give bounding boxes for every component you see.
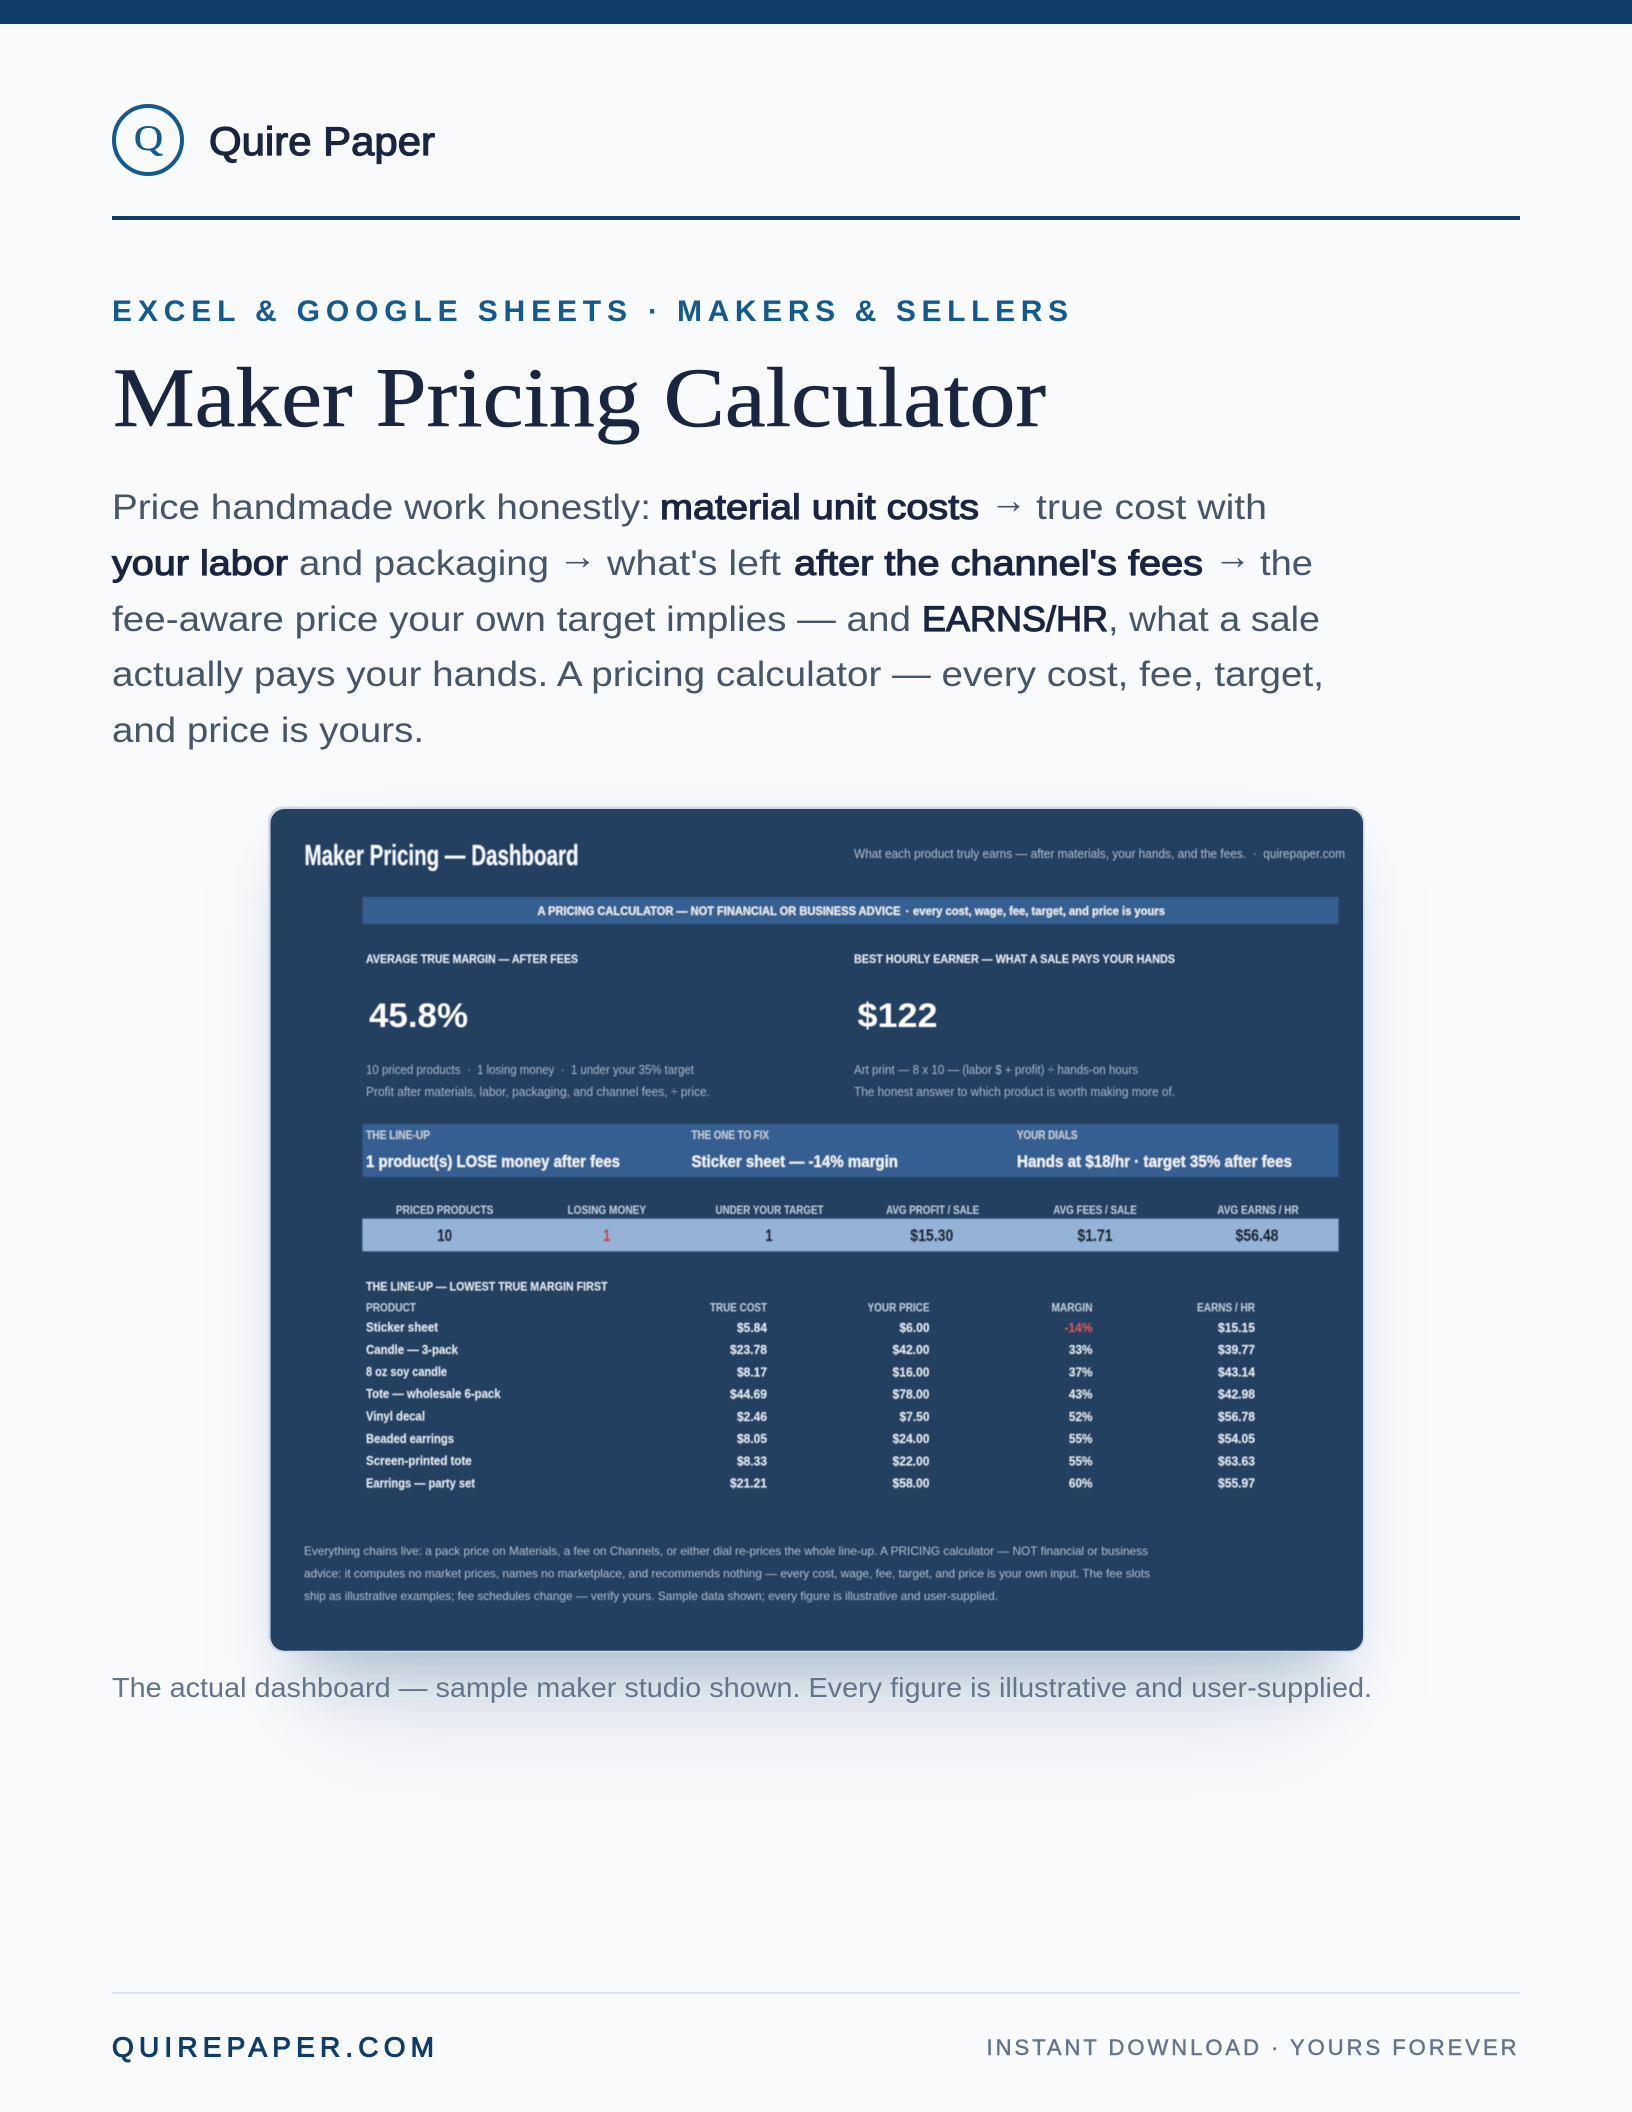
footer rule xyxy=(112,1992,1520,1994)
row: Beaded earrings: $24.00 xyxy=(892,1432,930,1446)
callout band: YOUR DIALS xyxy=(1017,1130,1078,1142)
row: Tote wholesale: $44.69 xyxy=(730,1388,767,1402)
callout band: THE LINE-UP xyxy=(366,1130,430,1142)
row: Candle 3-pack: $23.78 xyxy=(730,1343,767,1357)
row: Vinyl decal: 52% xyxy=(1069,1410,1092,1424)
KPI strip: PRICED PRODUCTS xyxy=(396,1205,494,1217)
intro paragraph: Price handmade work honestly: xyxy=(112,487,651,527)
row: Vinyl decal: Vinyl decal xyxy=(366,1410,425,1424)
intro paragraph: → xyxy=(558,536,597,578)
line-up table xyxy=(366,1280,1256,1491)
row: Sticker sheet: $5.84 xyxy=(737,1321,767,1335)
row: Candle 3-pack: $42.00 xyxy=(892,1343,930,1357)
row: Screen-printed tote: $22.00 xyxy=(892,1454,930,1468)
row: 8 oz soy candle: $16.00 xyxy=(892,1366,930,1380)
dashboard shadow xyxy=(300,860,1332,1700)
intro paragraph: the xyxy=(1260,543,1313,583)
table header row: EARNS / HR xyxy=(1197,1303,1256,1315)
intro paragraph: actually pays your hands. A pricing calculator — every cost, fee, target, xyxy=(112,654,1324,694)
KPI strip: AVG PROFIT / SALE xyxy=(886,1205,979,1217)
intro paragraph: what's left xyxy=(606,543,781,583)
stat: best hourly earner: BEST HOURLY EARNER — WHAT A SALE PAYS YOUR HANDS xyxy=(854,952,1175,966)
callout band: Sticker sheet — -14% margin xyxy=(692,1153,898,1171)
row: Screen-printed tote: 55% xyxy=(1069,1454,1092,1468)
footer tagline: INSTANT DOWNLOAD · YOURS FOREVER xyxy=(986,2035,1516,2060)
row: Tote wholesale xyxy=(366,1387,1255,1402)
row: Beaded earrings: 55% xyxy=(1069,1432,1092,1446)
row: 8 oz soy candle: 8 oz soy candle xyxy=(366,1365,447,1379)
dashboard title: Maker Pricing — Dashboard xyxy=(304,840,578,872)
table header row: PRODUCT xyxy=(366,1303,416,1315)
row: Candle 3-pack xyxy=(366,1343,1255,1357)
row: Vinyl decal: $2.46 xyxy=(737,1410,767,1424)
intro paragraph: → xyxy=(990,480,1027,522)
eyebrow xyxy=(112,295,1068,328)
row: Sticker sheet: $6.00 xyxy=(900,1321,930,1335)
KPI strip xyxy=(362,1205,1338,1251)
intro paragraph: , what a sale xyxy=(1108,599,1320,639)
row: Candle 3-pack: Candle — 3-pack xyxy=(366,1343,458,1357)
dashboard card xyxy=(270,809,1363,1651)
row: Candle 3-pack: 33% xyxy=(1069,1343,1092,1357)
intro paragraph: true cost with xyxy=(1036,487,1267,527)
panel: dashboard screenshot xyxy=(268,806,1364,1652)
intro paragraph: and packaging xyxy=(299,543,549,583)
row: 8 oz soy candle: $43.14 xyxy=(1218,1366,1255,1380)
dashboard card border xyxy=(268,806,1364,1652)
KPI strip: LOSING MONEY xyxy=(568,1205,646,1217)
stat: best hourly earner: $122 xyxy=(858,997,938,1035)
row: Screen-printed tote: Screen-printed tote xyxy=(366,1454,472,1468)
disclaimer banner: every cost, wage, fee, target, and price is yours xyxy=(913,904,1165,918)
row: Screen-printed tote: $8.33 xyxy=(737,1454,767,1468)
stat: average true margin: 10 priced products · 1 losing money · 1 under your 35% target xyxy=(366,1063,694,1077)
row: Vinyl decal: $56.78 xyxy=(1218,1410,1255,1424)
row: 8 oz soy candle: $8.17 xyxy=(737,1366,767,1380)
KPI strip: 10 xyxy=(437,1227,452,1245)
table heading: THE LINE-UP — LOWEST TRUE MARGIN FIRST xyxy=(366,1280,608,1294)
KPI strip: AVG FEES / SALE xyxy=(1053,1205,1137,1217)
dashboard footnote: ship as illustrative examples; fee schedules change — verify yours. Sample data shown; every figure is illustrative and user-supplied. xyxy=(304,1589,998,1603)
table header row: TRUE COST xyxy=(710,1303,767,1315)
row: Screen-printed tote: $63.63 xyxy=(1218,1454,1255,1468)
callout band: Hands at $18/hr · target 35% after fees xyxy=(1017,1153,1292,1171)
row: Sticker sheet: Sticker sheet xyxy=(366,1320,439,1334)
top bar xyxy=(0,0,1632,24)
dashboard contents xyxy=(304,840,1345,1603)
dashboard footnote: advice: it computes no market prices, names no marketplace, and recommends nothing — every cost, wage, fee, target, and price is your own input. The fee slots xyxy=(304,1566,1150,1580)
stat: average true margin xyxy=(366,952,710,1099)
row: 8 oz soy candle: 37% xyxy=(1069,1366,1092,1380)
stat: best hourly earner: The honest answer to which product is worth making more of. xyxy=(854,1085,1175,1099)
header rule xyxy=(112,216,1520,220)
table header row: YOUR PRICE xyxy=(868,1303,930,1315)
table header row: MARGIN xyxy=(1052,1303,1092,1315)
callout band: 1 product(s) LOSE money after fees xyxy=(366,1153,620,1171)
row: Earrings party set: $21.21 xyxy=(730,1477,767,1491)
intro paragraph: → xyxy=(1214,536,1251,578)
disclaimer banner xyxy=(362,897,1338,924)
intro paragraph: material unit costs xyxy=(660,487,979,527)
footer xyxy=(112,2032,1516,2062)
row: Beaded earrings: Beaded earrings xyxy=(366,1432,454,1446)
row: Tote wholesale: $78.00 xyxy=(892,1388,930,1402)
stat: average true margin: AVERAGE TRUE MARGIN — AFTER FEES xyxy=(366,952,578,966)
brand name: Quire Paper xyxy=(209,120,435,164)
stat: best hourly earner: Art print — 8 x 10 — (labor $ + profit) ÷ hands-on hours xyxy=(854,1063,1138,1077)
row: 8 oz soy candle xyxy=(366,1365,1255,1380)
row: Beaded earrings: $8.05 xyxy=(737,1432,767,1446)
stat: average true margin: Profit after materials, labor, packaging, and channel fees, ÷ price. xyxy=(366,1085,710,1099)
intro paragraph: fee-aware price your own target implies — and xyxy=(112,599,911,639)
disclaimer banner: A PRICING CALCULATOR — NOT FINANCIAL OR BUSINESS ADVICE xyxy=(538,904,900,918)
row: Tote wholesale: $42.98 xyxy=(1218,1388,1255,1402)
row: Candle 3-pack: $39.77 xyxy=(1218,1343,1255,1357)
callout band xyxy=(362,1124,1338,1177)
eyebrow: · xyxy=(648,295,658,328)
title: Maker Pricing Calculator xyxy=(113,351,1046,445)
intro paragraph: EARNS/HR xyxy=(922,599,1108,639)
row: Earrings party set: 60% xyxy=(1069,1477,1092,1491)
KPI strip: 1 xyxy=(603,1227,610,1245)
row: Beaded earrings xyxy=(366,1432,1255,1446)
row: Earrings party set: $58.00 xyxy=(892,1477,930,1491)
row: Sticker sheet: -14% xyxy=(1064,1321,1092,1335)
row: Earrings party set xyxy=(366,1476,1255,1491)
row: Screen-printed tote xyxy=(366,1454,1255,1468)
callout band: THE ONE TO FIX xyxy=(692,1130,769,1142)
row: Tote wholesale: 43% xyxy=(1069,1388,1092,1402)
caption: The actual dashboard — sample maker studio shown. Every figure is illustrative and user-supplied. xyxy=(112,1672,1372,1703)
row: Earrings party set: $55.97 xyxy=(1218,1477,1255,1491)
stat: average true margin: 45.8% xyxy=(369,997,468,1035)
row: Tote wholesale: Tote — wholesale 6-pack xyxy=(366,1387,501,1401)
intro paragraph: your labor xyxy=(112,543,288,583)
table header row xyxy=(366,1303,1256,1315)
row: Beaded earrings: $54.05 xyxy=(1218,1432,1255,1446)
eyebrow: EXCEL & GOOGLE SHEETS xyxy=(112,295,627,328)
KPI strip: $1.71 xyxy=(1078,1227,1112,1245)
KPI strip: UNDER YOUR TARGET xyxy=(716,1205,824,1217)
dashboard footnote: Everything chains live: a pack price on Materials, a fee on Channels, or either dial re-prices the whole line-up. A PRICING calculator — NOT financial or business xyxy=(304,1544,1148,1558)
KPI strip: 1 xyxy=(766,1227,772,1245)
KPI strip: AVG EARNS / HR xyxy=(1217,1205,1299,1217)
row: Earrings party set: Earrings — party set xyxy=(366,1476,476,1490)
footer site name: QUIREPAPER.COM xyxy=(112,2032,434,2062)
icon: Q logo circle xyxy=(114,106,182,174)
brand header xyxy=(114,106,435,174)
row: Sticker sheet xyxy=(366,1320,1255,1335)
disclaimer banner: · xyxy=(906,904,910,918)
stat: best hourly earner xyxy=(854,952,1175,1099)
eyebrow: MAKERS & SELLERS xyxy=(677,295,1068,328)
intro paragraph xyxy=(112,480,1324,750)
dashboard footnote xyxy=(304,1544,1150,1603)
row: Vinyl decal: $7.50 xyxy=(900,1410,930,1424)
row: Sticker sheet: $15.15 xyxy=(1218,1321,1255,1335)
KPI strip: $56.48 xyxy=(1236,1227,1278,1245)
KPI strip: $15.30 xyxy=(910,1227,953,1245)
intro paragraph: and price is yours. xyxy=(112,710,424,750)
icon: Q logo circle: Q xyxy=(134,118,163,158)
intro paragraph: after the channel's fees xyxy=(794,543,1203,583)
row: Vinyl decal xyxy=(366,1410,1255,1424)
dashboard subtitle: What each product truly earns — after materials, your hands, and the fees. · quirepaper.com xyxy=(854,847,1345,861)
